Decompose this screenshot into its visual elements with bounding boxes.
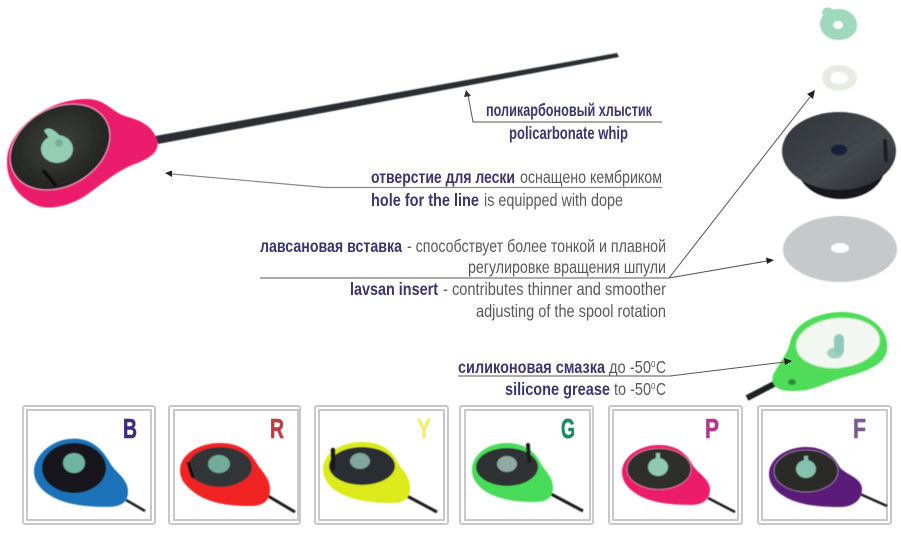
callout: silicone grease: до -50 [609, 357, 651, 377]
variant P: pink [609, 406, 742, 524]
variant B: blue: B [123, 413, 137, 444]
variant Y: yellow: Y [417, 413, 431, 444]
callout: hole for the line: hole for the line [371, 190, 479, 210]
part: green reel body with grease [747, 312, 887, 398]
callout: lavsan insert: - способствует более тонкой и плавной [407, 236, 666, 256]
part: green cap [820, 8, 857, 40]
variant R: red [169, 406, 300, 524]
variant Y: yellow [315, 406, 448, 524]
rod: main assembled ice rod [0, 53, 619, 208]
arrow: silicone grease pointer [458, 358, 792, 376]
green spool cap [41, 129, 73, 163]
callout: lavsan insert: регулировке вращения шпули [468, 257, 666, 277]
callout: lavsan insert: adjusting of the spool rotation [476, 301, 666, 321]
whip: polycarbonate rod [155, 53, 619, 144]
callout: policarbonate whip: policarbonate whip [509, 123, 628, 143]
variant B: blue [23, 406, 155, 524]
callout: hole for the line [165, 167, 662, 210]
callout: silicone grease: C [656, 357, 666, 377]
variant P: pink: P [705, 413, 719, 444]
callout: policarbonate whip [464, 90, 662, 143]
callout: silicone grease: to -50 [614, 379, 651, 399]
callout: silicone grease [458, 357, 666, 399]
callout: lavsan insert: лавсановая вставка [260, 236, 402, 256]
variant F: purple [758, 406, 891, 524]
callout: policarbonate whip: поликарбоновый хлыстик [486, 100, 652, 120]
callout: silicone grease: 0 [651, 360, 656, 369]
callout: lavsan insert [260, 90, 815, 321]
black spool disc [0, 87, 125, 207]
callout: hole for the line: отверстие для лески [371, 167, 515, 187]
variant F: purple: F [853, 413, 866, 444]
variant G: green: G [561, 413, 575, 444]
callout: silicone grease: C [656, 379, 666, 399]
exploded parts [747, 8, 897, 398]
callout: silicone grease: silicone grease [505, 379, 610, 399]
callout: hole for the line: оснащено кембриком [520, 167, 662, 187]
callout: silicone grease: силиконовая смазка [458, 357, 605, 377]
part: black spool [782, 112, 896, 199]
callout: lavsan insert: - contributes thinner and smoother [443, 279, 666, 299]
reel body: pink [7, 99, 158, 208]
part: lavsan disc [783, 216, 897, 282]
variant R: red: R [270, 413, 284, 444]
callout: hole for the line: is equipped with dope [484, 190, 623, 210]
callout: silicone grease: 0 [651, 382, 656, 391]
variant G: green [460, 406, 593, 524]
spool pin [43, 170, 56, 186]
part: white washer [822, 65, 857, 91]
callout: lavsan insert: lavsan insert [350, 279, 438, 299]
